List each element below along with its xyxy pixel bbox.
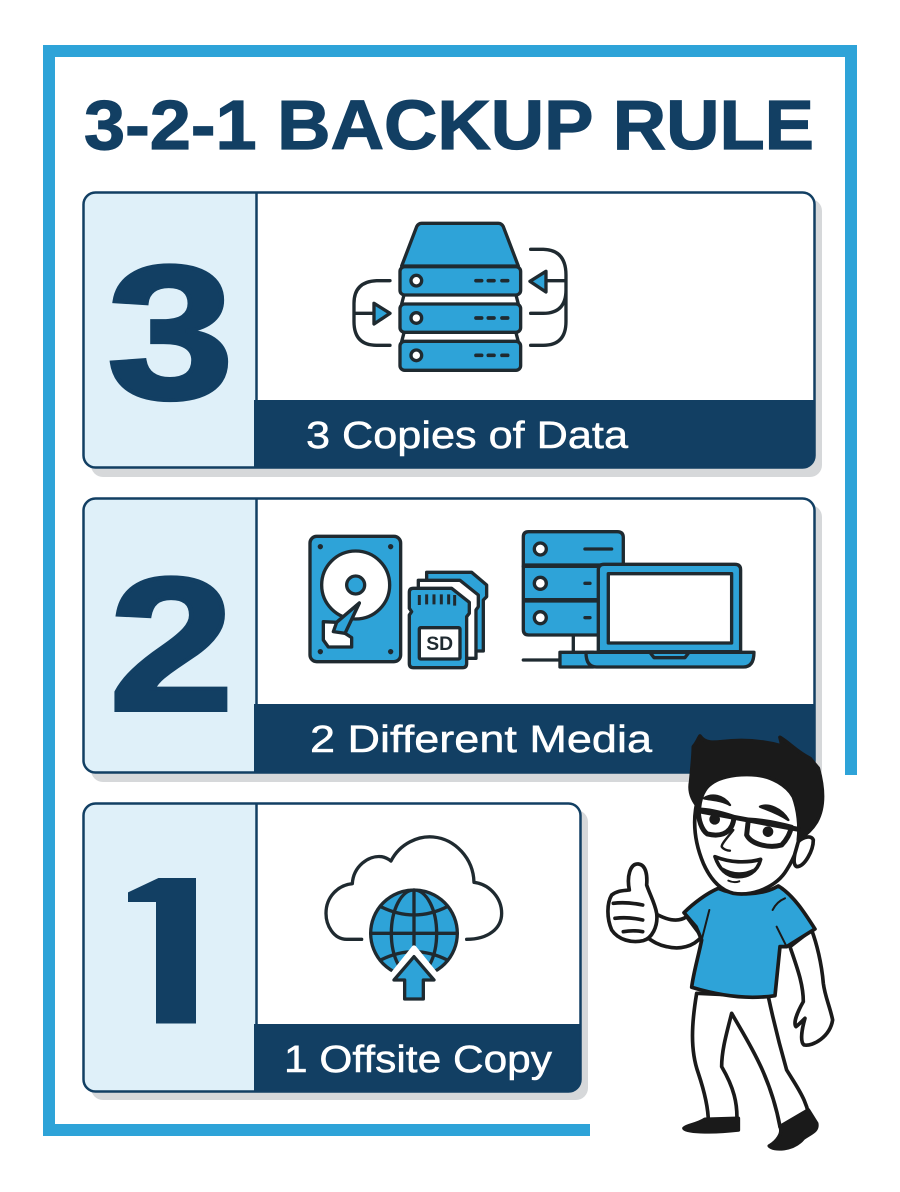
icon: server and laptop — [523, 532, 754, 667]
number 2: 2 — [109, 539, 234, 751]
face — [695, 771, 800, 894]
icon: SD cards: SD — [426, 634, 453, 655]
eyes — [709, 814, 773, 837]
glasses — [698, 810, 798, 846]
shirt creases — [702, 898, 787, 947]
character: thumbs-up man — [608, 736, 833, 1149]
title: 3-2-1 BACKUP RULE — [84, 86, 814, 164]
ear — [794, 837, 813, 867]
eyebrows — [704, 796, 788, 820]
icon: SD cards — [409, 572, 487, 668]
left arm — [648, 913, 702, 948]
right arm and hand — [790, 930, 833, 1045]
caption: 3 copies of data: 3 Copies of Data — [306, 415, 629, 457]
number 1: 1 — [89, 833, 250, 1068]
thumbs-up hand — [608, 864, 657, 942]
icon: server stack with arrows — [354, 223, 566, 370]
shoes — [684, 1110, 817, 1149]
caption: 2 different media: 2 Different Media — [310, 719, 653, 761]
blue t-shirt — [684, 886, 815, 997]
hair — [690, 736, 822, 840]
panel: 2 different media — [83, 498, 822, 782]
panel: 1 offsite copy — [83, 803, 588, 1100]
icon: hard drive — [310, 536, 401, 662]
caption: 1 offsite copy: 1 Offsite Copy — [284, 1039, 552, 1081]
nose — [722, 830, 733, 851]
panel: 3 copies of data — [83, 192, 822, 477]
legs — [692, 993, 810, 1127]
number 3: 3 — [107, 227, 234, 439]
icon: cloud and globe upload — [326, 837, 502, 999]
mouth — [715, 857, 761, 877]
